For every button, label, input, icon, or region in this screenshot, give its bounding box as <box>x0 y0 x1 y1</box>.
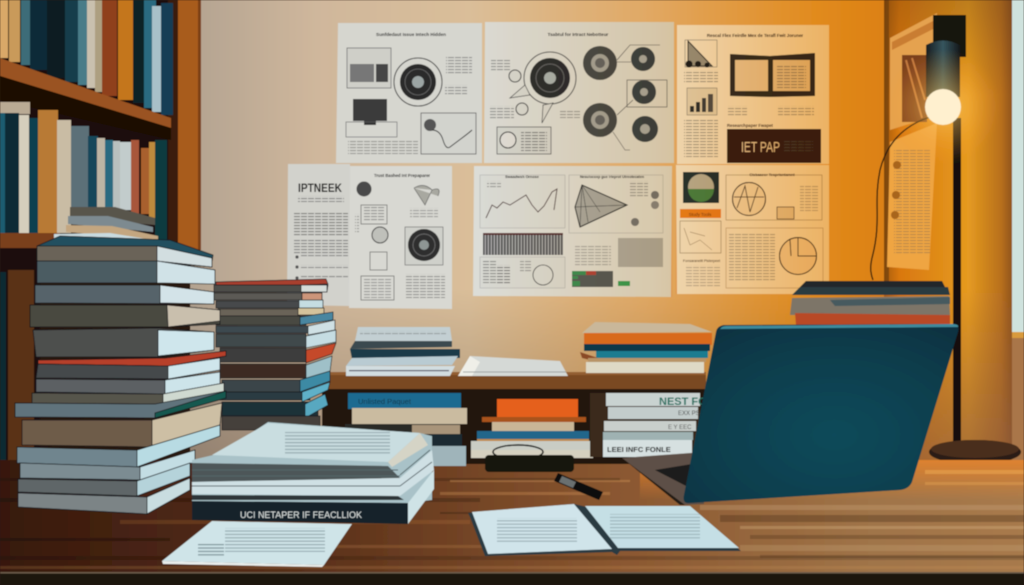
poster 6 status bars <box>572 246 630 287</box>
wall background <box>190 0 1014 480</box>
poster 6 chart panel <box>480 175 565 228</box>
poster 1 ring diagram <box>394 58 442 106</box>
poster 2 main ring <box>510 52 576 123</box>
poster 6 lower left <box>480 257 565 288</box>
poster 5 <box>349 166 452 309</box>
poster 7 chart panels: Cisbaaeor Tesprisntamnt <box>749 173 795 177</box>
poster 3 open book <box>730 53 815 97</box>
books under shelf center <box>471 399 594 458</box>
book shadow and spine <box>468 504 741 556</box>
upper shelf board <box>0 58 171 128</box>
poster 3: Researchpaper Fwapet <box>727 123 773 128</box>
books under shelf right: E Y EEC <box>668 425 692 431</box>
poster 6 grey note <box>618 238 663 267</box>
small books on shelf <box>54 207 165 246</box>
lamp base <box>929 440 1021 464</box>
bookshelf <box>0 0 201 250</box>
poster 2 satellite rings <box>509 45 667 150</box>
second book stack <box>214 279 336 430</box>
warm light on right hand posters <box>473 22 829 297</box>
lamp head <box>926 40 960 97</box>
laptop base <box>622 452 704 505</box>
stack on shelf right <box>580 322 712 373</box>
wood grain <box>0 470 1024 569</box>
poster 2 <box>484 22 674 163</box>
poster 2 title: Tsabtul for Irtract Nebotteur <box>548 32 609 37</box>
black book <box>192 470 434 524</box>
open book on desk <box>468 504 741 556</box>
right page <box>585 506 739 548</box>
pen case and cable <box>485 445 574 472</box>
upper shelf books <box>0 0 173 115</box>
poster 3 bar chart <box>687 88 717 115</box>
power cable <box>871 117 930 280</box>
laptop lid highlight <box>720 324 958 330</box>
books under shelf right: EXX PS <box>678 411 700 417</box>
poster 1 <box>336 23 482 163</box>
blue book title: Unlisted Paquet <box>358 397 412 406</box>
poster 7 orange label <box>680 209 721 218</box>
poster 3 title: Rescal Flex Feirdle Mex de Terafl Fwit Joruner <box>707 33 803 38</box>
poster 5 title: Trust Bashed Int Prepaparer <box>374 173 430 178</box>
poster 1 title: Sunfdedaut Issue Intech Hidden <box>376 32 446 37</box>
stack on right wall <box>790 281 950 325</box>
poster 7 orange label: Study Tools <box>689 212 712 217</box>
side papers <box>887 13 937 270</box>
poster 1 line chart <box>421 113 476 154</box>
paper stack with book <box>192 422 434 524</box>
poster 7 chart panels <box>726 173 823 288</box>
books under shelf right <box>590 393 707 457</box>
lamp pole <box>953 118 961 446</box>
banner text: IET PAP <box>741 139 780 156</box>
laptop lid <box>684 324 958 503</box>
laptop <box>622 324 958 505</box>
book title: LEEI INFC FONLE <box>607 445 671 454</box>
poster 6 bar strip <box>483 233 563 255</box>
poster 4 <box>287 164 350 306</box>
main left book stack <box>15 236 226 514</box>
lower shelf board <box>0 233 60 248</box>
desk front edge <box>0 573 1024 585</box>
poster 6 pyramid <box>569 175 663 233</box>
stack on shelf left <box>346 327 460 376</box>
poster 6 pyramid: Nesulocoxp gue Irieprot Utreotecaten <box>580 175 644 179</box>
left page <box>472 504 612 554</box>
pen <box>554 473 603 500</box>
paper sheet on desk <box>162 521 352 567</box>
poster 6 <box>473 166 672 297</box>
poster 7: Fonsaraneltt Pisterpeet <box>683 259 720 263</box>
poster 7 <box>676 165 829 294</box>
poster 6 chart panel: Swaadwsh Ornose <box>505 175 539 179</box>
banner <box>727 129 821 163</box>
black book title: UCI NETAPER IF FEACLLIOK <box>240 510 363 521</box>
poster 3 <box>677 25 829 164</box>
book title: NEST FO <box>659 396 707 408</box>
poster 3 triangle graphic <box>685 40 717 68</box>
books under shelf left <box>345 393 467 466</box>
desk lamp <box>871 15 1021 464</box>
desk surface <box>0 460 1024 585</box>
poster 7 thumbnail <box>683 172 719 203</box>
window edge <box>1012 0 1024 480</box>
poster 5 diagrams <box>355 182 445 300</box>
lower shelf books <box>0 102 167 240</box>
lower left cabinet <box>0 248 40 510</box>
poster 4 heading: IPTNEEK <box>298 181 342 195</box>
lamp bracket <box>933 15 966 57</box>
poster 2 legend box <box>497 127 551 154</box>
lamp glow <box>885 49 1001 165</box>
lamp bulb <box>925 89 961 125</box>
middle shelf <box>322 372 706 464</box>
loose papers on shelf <box>458 356 568 376</box>
